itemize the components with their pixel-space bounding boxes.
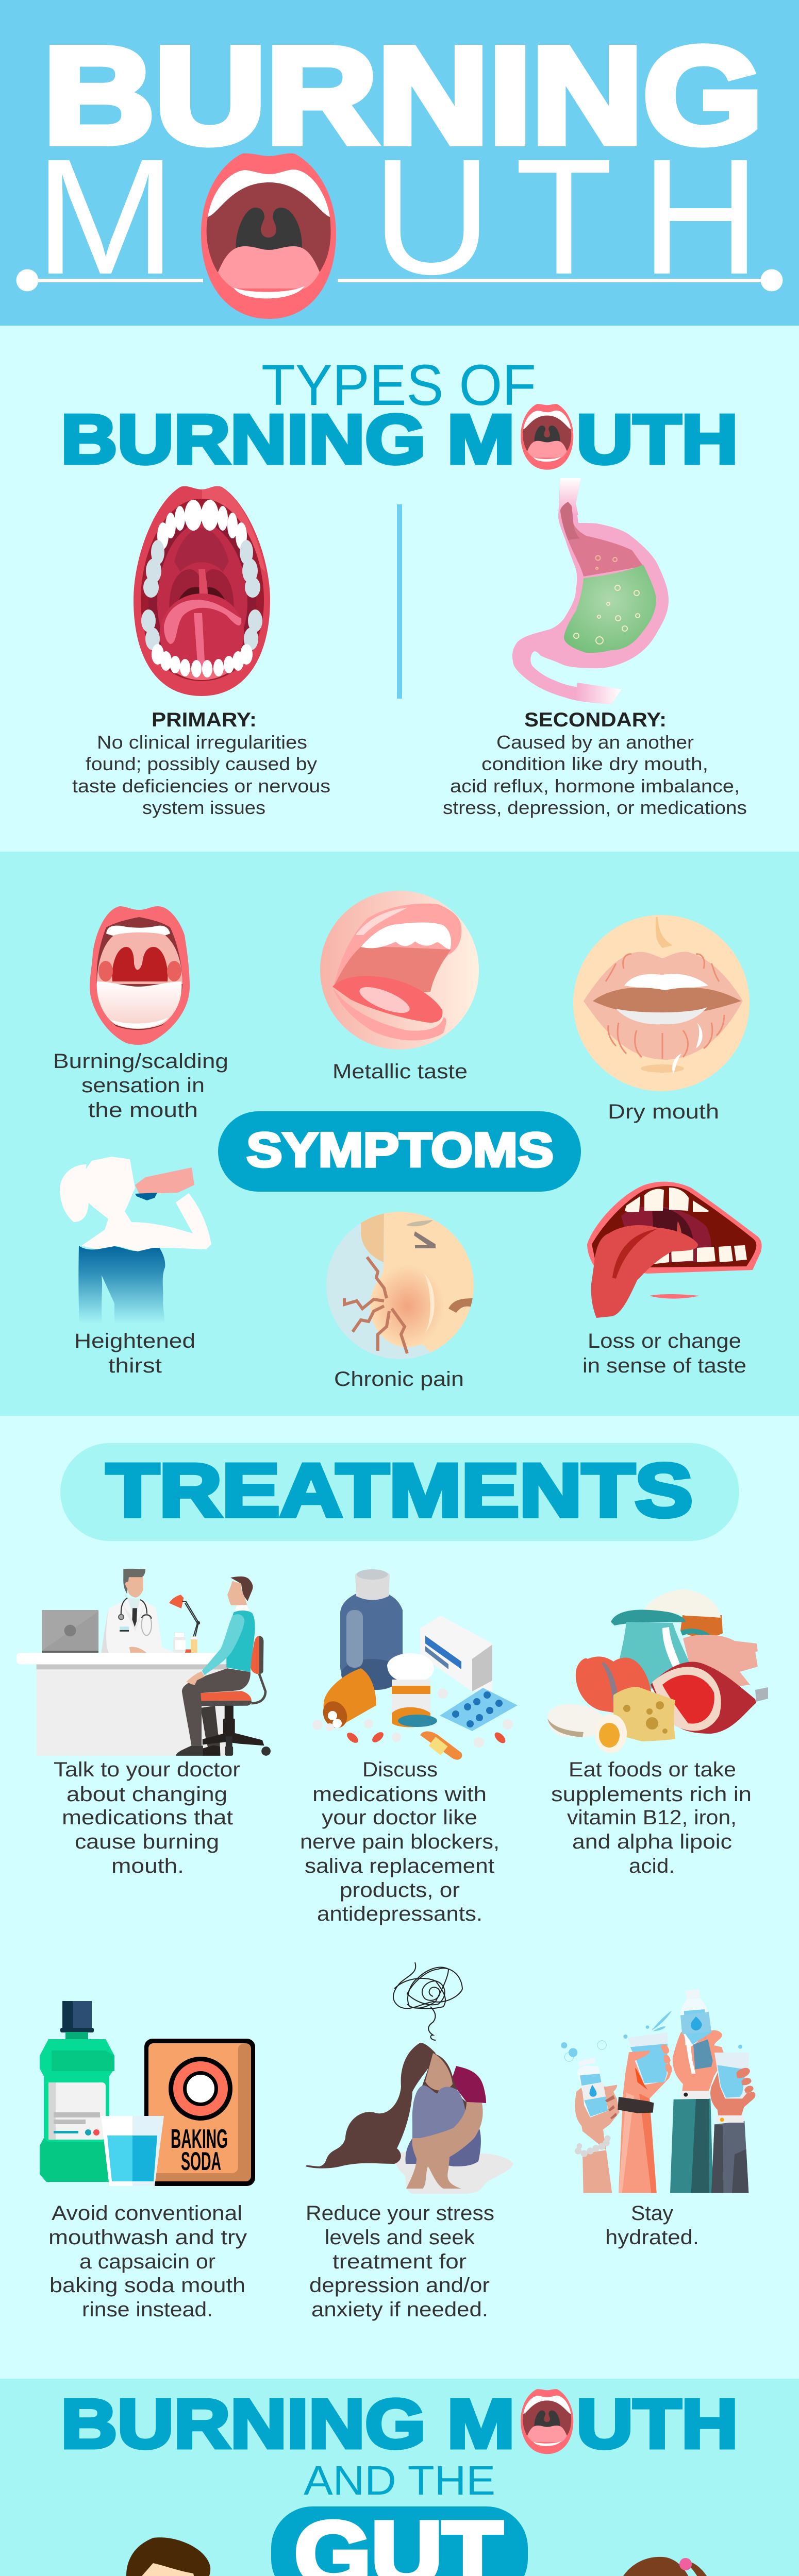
heading: burning mouth xyxy=(61,2385,738,2463)
text block: Discuss xyxy=(362,1758,438,1781)
icon: small mouth in heading xyxy=(521,2389,573,2454)
text block: primary: found; possibly caused by xyxy=(86,753,317,774)
title: Mouth letters xyxy=(35,124,760,309)
icon: hands raising water xyxy=(561,1990,755,2193)
panel: burning mouth and the gut xyxy=(0,2379,799,2576)
text block: primary xyxy=(72,709,330,818)
text block: a capsaicin or xyxy=(79,2250,215,2273)
icon: mouthwash bottle, baking soda box and glass: BAKING xyxy=(171,2124,228,2154)
text block: secondary: condition like dry mouth, xyxy=(481,753,708,774)
text block: primary: system issues xyxy=(142,797,265,818)
heading: burning mouth: M xyxy=(447,400,515,478)
title: Burning: BURNING xyxy=(43,19,763,172)
text block: secondary: Caused by an another xyxy=(496,732,694,753)
title line: mouth baseline rule with dots xyxy=(16,269,783,292)
icon: stomach with acid xyxy=(512,478,669,704)
label: Burning/scalding xyxy=(53,1050,228,1073)
icon: metallic taste mouth xyxy=(320,891,479,1049)
panel: header xyxy=(0,0,799,326)
text block: and alpha lipoic xyxy=(572,1831,732,1853)
label: sensation in xyxy=(81,1074,205,1097)
text block: medications that xyxy=(62,1806,233,1829)
text block: baking soda mouth xyxy=(49,2274,245,2297)
text block: secondary: stress, depression, or medications xyxy=(443,797,747,818)
icon: chronic face pain xyxy=(326,1208,479,1360)
label: Dry mouth xyxy=(608,1100,719,1123)
text block xyxy=(306,2202,494,2321)
text block: vitamin B12, iron, xyxy=(567,1806,737,1829)
icon: stressed woman with scribble xyxy=(306,1962,513,2194)
title: Mouth letters: M xyxy=(35,124,176,309)
heading: burning mouth: UTH xyxy=(576,400,738,478)
text block: saliva replacement xyxy=(305,1855,494,1877)
illustration: man with stomach pain xyxy=(20,2537,210,2576)
heading: burning mouth: BURNING xyxy=(61,400,426,478)
icon: burning throat mouth xyxy=(90,906,190,1045)
label xyxy=(53,1050,228,1122)
treatments pill: TREATMENTS xyxy=(106,1448,693,1532)
text block: levels and seek xyxy=(325,2226,475,2249)
label: Heightened xyxy=(74,1330,195,1352)
text block: mouthwash and try xyxy=(48,2226,247,2249)
title: Mouth letters: U xyxy=(372,124,492,309)
panel: types of burning mouth xyxy=(0,326,799,852)
text block: hydrated. xyxy=(605,2226,699,2249)
label: the mouth xyxy=(88,1099,198,1122)
icon: medications xyxy=(312,1569,518,1760)
text block: your doctor like xyxy=(322,1806,477,1829)
text block: depression and/or xyxy=(309,2274,490,2297)
panel: symptoms xyxy=(0,852,799,1416)
text block: Talk to your doctor xyxy=(54,1758,240,1781)
text block: Stay xyxy=(631,2202,673,2225)
label: Chronic pain xyxy=(334,1368,464,1391)
label: in sense of taste xyxy=(582,1354,746,1377)
text block: primary: No clinical irregularities xyxy=(97,732,307,753)
text block: secondary: SECONDARY: xyxy=(524,709,667,731)
text block: mouth. xyxy=(111,1855,184,1877)
text block: primary: taste deficiencies or nervous xyxy=(72,775,330,796)
text block: antidepressants. xyxy=(317,1903,482,1925)
text block: Avoid conventional xyxy=(52,2202,242,2225)
text block xyxy=(300,1758,500,1925)
text block: supplements rich in xyxy=(551,1783,752,1806)
text block xyxy=(551,1758,752,1877)
heading: burning mouth: BURNING xyxy=(61,2385,426,2463)
text block xyxy=(605,2202,699,2249)
divider xyxy=(397,504,402,699)
text block: products, or xyxy=(340,1879,460,1902)
icon: anatomical open mouth xyxy=(134,486,270,696)
heading: burning mouth xyxy=(61,400,738,478)
icon: small mouth in heading xyxy=(521,404,573,470)
label: Metallic taste xyxy=(332,1060,468,1083)
icon: tongue and mouth xyxy=(587,1182,762,1318)
title: Mouth letters: H xyxy=(641,124,760,309)
text block: treatment for xyxy=(332,2250,467,2273)
text block: acid. xyxy=(629,1855,675,1877)
text block: anxiety if needed. xyxy=(311,2298,488,2321)
label xyxy=(74,1330,195,1377)
text block: secondary xyxy=(443,709,747,818)
illustration: woman with stomach pain xyxy=(618,2557,780,2576)
symptoms pill: SYMPTOMS xyxy=(246,1123,554,1177)
text block: secondary: acid reflux, hormone imbalance, xyxy=(450,775,740,796)
heading: and the: AND THE xyxy=(304,2458,495,2503)
text block: medications with xyxy=(312,1783,487,1806)
icon: mouthwash bottle, baking soda box and glass xyxy=(40,2001,255,2186)
text block: about changing xyxy=(66,1783,227,1806)
label: thirst xyxy=(108,1354,162,1377)
panel: treatments xyxy=(0,1416,799,2379)
heading: burning mouth: UTH xyxy=(576,2385,738,2463)
text block: Eat foods or take xyxy=(569,1758,736,1781)
icon: doctor and patient at a desk xyxy=(16,1569,271,1756)
text block xyxy=(54,1758,240,1877)
text block: primary: PRIMARY: xyxy=(152,709,257,731)
icon: open cartoon mouth as letter O xyxy=(201,154,336,319)
icon: dry mouth xyxy=(573,915,750,1091)
treatments pill xyxy=(60,1443,739,1541)
icon: woman drinking xyxy=(60,1157,211,1324)
heading: burning mouth: M xyxy=(447,2385,515,2463)
title: Mouth letters: T xyxy=(515,124,613,309)
text block: cause burning xyxy=(75,1831,219,1853)
label xyxy=(582,1330,746,1377)
label: Loss or change xyxy=(588,1330,741,1352)
text block: nerve pain blockers, xyxy=(300,1831,500,1853)
text block xyxy=(48,2202,247,2321)
icon: foods xyxy=(547,1589,768,1753)
heading: types of: TYPES OF xyxy=(261,353,536,417)
icon: mouthwash bottle, baking soda box and glass: SODA xyxy=(181,2147,221,2176)
text block: rinse instead. xyxy=(82,2298,213,2321)
text block: Reduce your stress xyxy=(306,2202,494,2225)
symptoms pill xyxy=(218,1111,581,1192)
